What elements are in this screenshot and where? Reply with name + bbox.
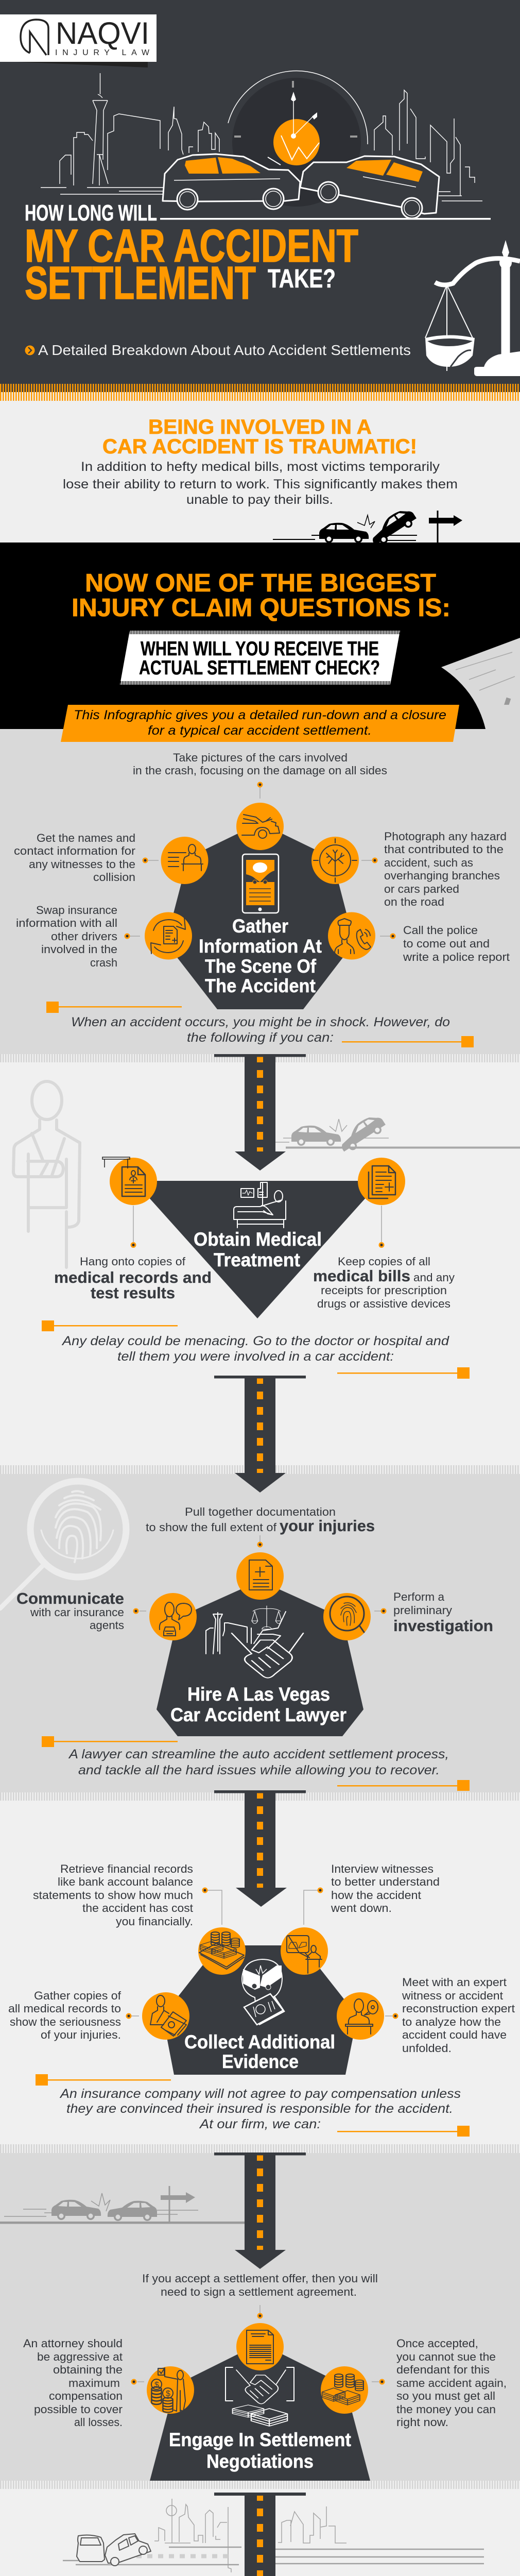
panel: gather information: [14, 751, 510, 1047]
heading: INJURY CLAIM QUESTIONS IS:: [72, 594, 450, 622]
text: swap insurance: other drivers: [51, 930, 117, 943]
heading: [184, 2031, 335, 2072]
text: expert: to analyze how the: [402, 2015, 501, 2028]
heading: [199, 916, 322, 996]
ticket question: WHEN WILL YOU RECEIVE THE: [141, 638, 379, 660]
icon: damaged car: [236, 803, 284, 850]
text: once accepted: you cannot sue the: [396, 2350, 496, 2363]
text block: In addition to hefty medical bills, most victims temporarily: [81, 460, 440, 474]
icon: scales of justice: [425, 240, 520, 376]
text: hazards: on the road: [384, 895, 444, 908]
text: once accepted: Once accepted,: [396, 2337, 478, 2350]
icon: grey cars and sign: [0, 2186, 245, 2224]
heading: [170, 1684, 346, 1725]
text: financial records: you financially.: [116, 1915, 193, 1928]
icon: cash and coins: [321, 2366, 368, 2414]
text: police: Call the police: [403, 924, 478, 937]
text: witnesses: [14, 832, 159, 884]
text: medical bills: drugs or assistive devices: [317, 1297, 450, 1310]
heading: [72, 569, 450, 622]
header background: [0, 0, 520, 384]
caption: the following if you can:: [187, 1030, 334, 1045]
orange banner: This Infographic gives you a detailed run-down and a closure: [74, 708, 446, 722]
panel: biggest question: [0, 543, 520, 729]
text: settlement agreement: If you accept a settlement offer, then you will: [142, 2272, 378, 2285]
orange banner: [61, 705, 459, 742]
text: financial records: the accident has cost: [82, 1902, 193, 1914]
text: hazards: overhanging branches: [384, 869, 500, 882]
heading: Collect Additional: [184, 2031, 335, 2053]
panel: negotiations background: [0, 2153, 520, 2481]
caption: At our firm, we can:: [199, 2117, 321, 2131]
text: hazards: [361, 830, 507, 908]
icon: expert witness: [337, 1992, 384, 2040]
icon: fingerprint magnifier: [323, 1593, 371, 1640]
skyline: [41, 73, 482, 201]
panel: lawsuit background: [0, 2481, 520, 2576]
panel: collect additional evidence: [8, 1862, 515, 2137]
logo: INJURY LAW: [55, 48, 150, 57]
icon: black car crash and sign: [273, 505, 462, 549]
text: attorney: [23, 2337, 144, 2429]
text: interview witnesses: to better understand: [331, 1875, 440, 1888]
heading: [194, 1229, 322, 1270]
text: expert: reconstruction expert: [402, 2002, 515, 2015]
text: gather copies: [8, 1989, 139, 2041]
panel: settlement negotiations: [23, 2272, 507, 2481]
icon: person with coins: [147, 2366, 194, 2414]
text: swap insurance: Swap insurance: [36, 904, 117, 917]
text: attorney: compensation: [49, 2389, 123, 2402]
heading: BEING INVOLVED IN A: [148, 416, 372, 438]
illustration: city skyline, clock and car crash: [41, 71, 491, 219]
text: witnesses: collision: [93, 871, 135, 884]
caption: [42, 1320, 470, 1379]
icon: hazard tree: [311, 837, 359, 884]
text: medical records: [54, 1206, 212, 1302]
icon: swap insurance: [145, 912, 192, 959]
caption: they are convinced their insured is responsible for the accident.: [66, 2102, 453, 2116]
text: financial records: [33, 1862, 222, 1928]
caption: tell them you were involved in a car accident:: [117, 1349, 394, 1364]
text: gather copies: Gather copies of: [34, 1989, 122, 2002]
panel: intro: [0, 401, 520, 549]
text: witnesses: Get the names and: [37, 832, 135, 844]
icon: background magnifier fingerprint: [0, 1481, 126, 1608]
text: take pictures: Take pictures of the cars involved: [173, 751, 348, 764]
triangle: [134, 1181, 381, 1318]
text: once accepted: the money you can: [396, 2403, 496, 2416]
icon: person with coins: $: [154, 2381, 159, 2389]
arrow: road 3: [214, 1790, 306, 1907]
heading: Treatment: [214, 1249, 300, 1270]
text: medical bills: and any: [413, 1271, 455, 1284]
text: attorney: maximum: [68, 2377, 120, 2389]
logo: [0, 14, 157, 67]
text: documentation: your injuries: [280, 1517, 375, 1535]
heading: NOW ONE OF THE BIGGEST: [85, 569, 436, 597]
left car: [163, 154, 300, 210]
heading: Information At: [199, 936, 322, 957]
caption: An insurance company will not agree to pay compensation unless: [59, 2087, 461, 2101]
text: communicate: with car insurance: [30, 1606, 124, 1619]
text: investigation: investigation: [393, 1617, 493, 1635]
caption: When an accident occurs, you might be in shock. However, do: [71, 1015, 450, 1029]
text: once accepted: [372, 2337, 507, 2429]
text: expert: accident could have: [402, 2028, 507, 2041]
text: medical bills: receipts for prescription: [321, 1284, 447, 1297]
text: take pictures: in the crash, focusing on the damage on all sides: [133, 764, 387, 777]
heading: Negotiations: [206, 2451, 314, 2472]
heading: Hire A Las Vegas: [187, 1684, 330, 1705]
text: financial records: statements to show how much: [33, 1889, 193, 1902]
text: medical bills: [313, 1206, 455, 1310]
icon: communicate: [149, 1593, 197, 1640]
icon: agreement document: [236, 2323, 284, 2370]
heading: [102, 416, 417, 458]
text: expert: [385, 1976, 515, 2055]
text: investigation: Perform a: [393, 1590, 445, 1603]
text: medical records: test results: [91, 1284, 175, 1302]
text: attorney: possible to cover: [34, 2403, 123, 2416]
text: gather copies: show the seriousness: [10, 2015, 121, 2028]
text: investigation: preliminary: [393, 1604, 452, 1617]
paper: [441, 638, 520, 729]
text: financial records: Retrieve financial records: [60, 1862, 193, 1875]
text: documentation: to show the full extent of: [146, 1521, 277, 1534]
text: communicate: agents: [90, 1619, 124, 1632]
illustration: outline skyline and crashed cars: [63, 2499, 484, 2572]
text: swap insurance: [16, 904, 140, 969]
orange banner: for a typical car accident settlement.: [148, 723, 372, 738]
heading: Car Accident Lawyer: [170, 1704, 346, 1725]
text: hazards: that contributed to the: [384, 843, 504, 856]
right car: [300, 156, 439, 218]
text: attorney: be aggressive at: [37, 2350, 123, 2363]
title: MY CAR ACCIDENT: [25, 221, 358, 272]
caption: and tackle all the hard issues while allowing you to recover.: [78, 1763, 440, 1777]
text: hazards: accident, such as: [384, 856, 473, 869]
orange stripe divider: [0, 384, 520, 401]
heading: Obtain Medical: [194, 1229, 322, 1250]
caption: Any delay could be menacing. Go to the doctor or hospital and: [61, 1334, 449, 1348]
icon: skyline, scales and handshake: [206, 1606, 303, 1678]
caption: [46, 1002, 474, 1047]
polygon: [157, 1581, 363, 1736]
icon: document with plus: [236, 1552, 284, 1600]
text: investigation: [374, 1590, 493, 1635]
panel: lawyer background: [0, 1474, 520, 1792]
caption: A lawyer can streamline the auto accident settlement process,: [68, 1747, 449, 1761]
text: financial records: like bank account balance: [58, 1875, 193, 1888]
text: police: write a police report: [403, 951, 510, 963]
title: HOW LONG WILL: [25, 200, 157, 226]
text: hazards: or cars parked: [384, 883, 459, 895]
polygon: [150, 2343, 370, 2481]
icon: hospital bed: [234, 1182, 286, 1228]
text: once accepted: defendant for this: [396, 2363, 490, 2376]
text: once accepted: so you must get all: [396, 2389, 495, 2402]
icon: person with coins: $: [166, 2389, 170, 2398]
text: police: to come out and: [403, 937, 490, 950]
polygon: [163, 1945, 357, 2075]
impact spark: [268, 135, 319, 165]
text: expert: unfolded.: [402, 2042, 452, 2055]
text: documentation: Pull together documentation: [185, 1505, 336, 1518]
title: TAKE?: [268, 264, 336, 293]
heading: Engage In Settlement: [169, 2429, 351, 2450]
text: witnesses: contact information for: [14, 844, 135, 857]
icon: injured person with sling: [13, 1081, 80, 1267]
text: attorney: An attorney should: [23, 2337, 123, 2350]
ticket question: ACTUAL SETTLEMENT CHECK?: [139, 657, 380, 679]
title: [25, 200, 358, 309]
text: once accepted: right now.: [396, 2416, 448, 2429]
text: expert: Meet with an expert: [402, 1976, 507, 1989]
panel: obtain medical treatment: [42, 1157, 470, 1379]
text: attorney: obtaining the: [53, 2363, 123, 2376]
panel: additional evidence background: [0, 1792, 520, 2153]
text: medical records: Hang onto copies of: [80, 1255, 186, 1268]
text: medical records: medical records and: [54, 1268, 212, 1286]
text: swap insurance: involved in the: [41, 943, 117, 956]
clock: [228, 71, 368, 207]
subtitle: A Detailed Breakdown About Auto Accident Settlements: [38, 342, 411, 358]
caption: [36, 2074, 470, 2137]
icon: medical record: [102, 1157, 157, 1205]
caption: [42, 1736, 470, 1791]
text: communicate: [16, 1589, 146, 1632]
text: interview witnesses: went down.: [331, 1902, 392, 1914]
icon: gather medical records: [142, 1992, 189, 2040]
arrow: road 4: [214, 2153, 306, 2269]
arrow: road 1: [214, 1054, 306, 1171]
text: interview witnesses: how the accident: [331, 1889, 421, 1902]
logo: NAQVI: [56, 16, 149, 50]
arrow: road 2: [214, 1376, 306, 1493]
text: swap insurance: information with all: [16, 917, 117, 929]
text block: unable to pay their bills.: [186, 493, 333, 507]
icon: police: [328, 912, 375, 959]
heading: The Scene Of: [205, 956, 317, 977]
heading: CAR ACCIDENT IS TRAUMATIC!: [102, 435, 417, 458]
text: communicate: Communicate: [16, 1589, 124, 1607]
text: gather copies: all medical records to: [8, 2002, 121, 2015]
text: witnesses: any witnesses to the: [29, 858, 135, 871]
text: swap insurance: crash: [90, 956, 117, 969]
icon: crash speech bubble and documents: [242, 1959, 284, 2025]
text: gather copies: of your injuries.: [41, 2028, 121, 2041]
text block: lose their ability to return to work. This significantly makes them: [63, 477, 458, 492]
heading: Evidence: [222, 2051, 299, 2072]
ticket question: [120, 631, 400, 685]
icon: handshake and cash: [226, 2367, 294, 2426]
text: attorney: all losses.: [74, 2416, 123, 2429]
icon: witness with crash bubble: [281, 1927, 328, 1975]
icon: smartphone: [242, 854, 279, 913]
text block: [63, 460, 458, 507]
heading: The Accident: [205, 975, 316, 996]
text: interview witnesses: [304, 1862, 440, 1925]
arrow: road 5: [214, 2493, 306, 2576]
panel: medical treatment background: [0, 1054, 520, 1474]
text: settlement agreement: [142, 2272, 378, 2318]
icon: witness: [161, 837, 208, 884]
text: hazards: Photograph any hazard: [384, 830, 507, 843]
text: interview witnesses: Interview witnesses: [331, 1862, 434, 1875]
text: documentation: [146, 1505, 375, 1548]
panel: step one background: [0, 705, 520, 1054]
panel: hire a lawyer: [16, 1505, 493, 1791]
text: take pictures: [133, 751, 387, 799]
icon: medical bills: [358, 1158, 405, 1205]
title: SETTLEMENT: [25, 258, 256, 309]
text: once accepted: same accident again,: [396, 2377, 507, 2389]
icon: cash and coins: [198, 1927, 246, 1975]
text: expert: witness or accident: [402, 1989, 503, 2002]
icon: grey car crash: [275, 1111, 520, 1155]
text: police: [380, 924, 510, 963]
polygon: [166, 823, 354, 1009]
text: settlement agreement: need to sign a settlement agreement.: [161, 2285, 357, 2298]
text: medical bills: Keep copies of all: [338, 1255, 430, 1268]
heading: [169, 2429, 351, 2472]
text: medical bills: medical bills: [313, 1267, 410, 1285]
heading: Gather: [232, 916, 288, 937]
